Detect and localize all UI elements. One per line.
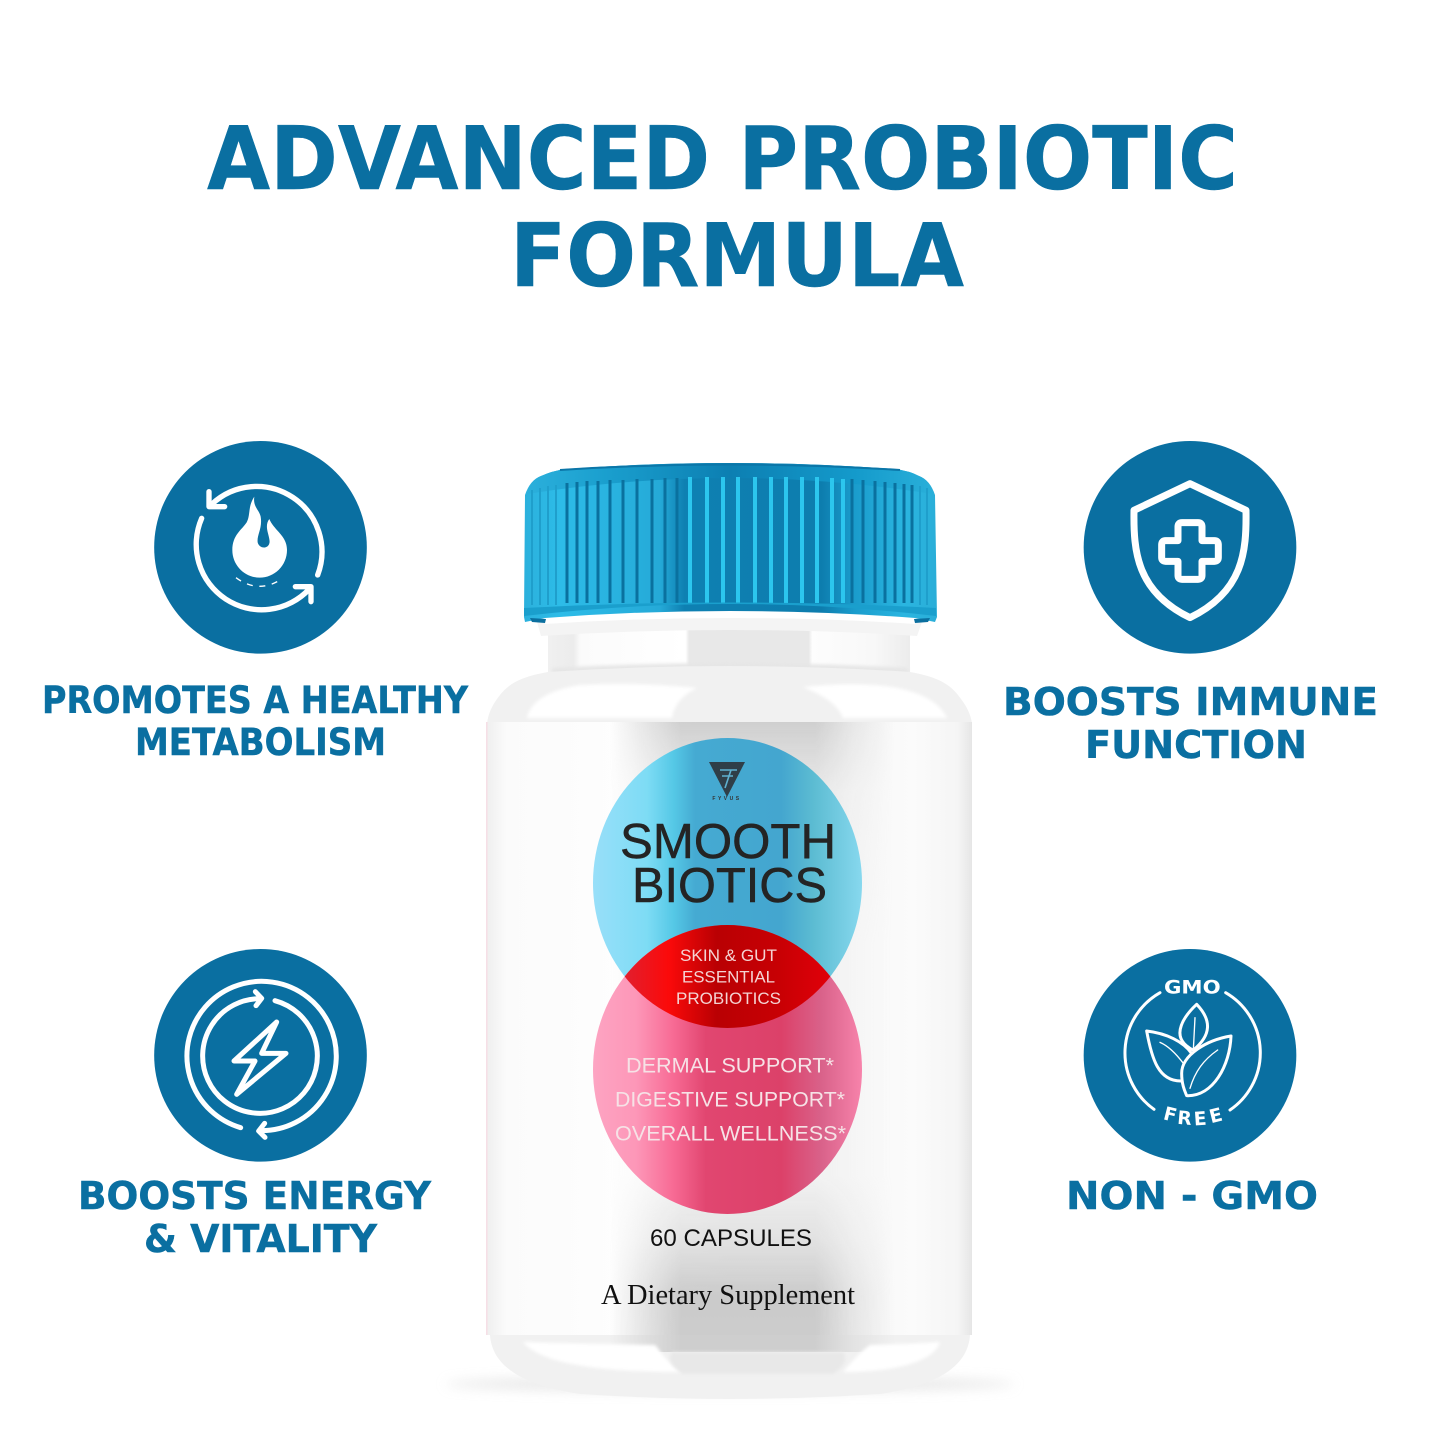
icon: energy bolt bbox=[154, 949, 367, 1162]
icon: GMO free badge: E bbox=[1207, 1105, 1225, 1128]
label: boosts immune function: FUNCTION bbox=[1085, 723, 1307, 767]
bottle ground shadow bbox=[445, 1377, 1015, 1391]
label: boosts energy and vitality: & VITALITY bbox=[144, 1217, 377, 1261]
label: red overlap bbox=[624, 925, 830, 1028]
title: ADVANCED PROBIOTIC bbox=[207, 108, 1238, 210]
bottle body bbox=[487, 722, 972, 1335]
product name bbox=[620, 815, 836, 913]
icon: GMO free badge: R bbox=[1176, 1108, 1193, 1130]
label: boosts immune function: BOOSTS IMMUNE bbox=[1003, 680, 1378, 724]
bottle neck bbox=[537, 612, 922, 680]
label: non GMO: NON - GMO bbox=[1066, 1174, 1318, 1218]
title bbox=[207, 108, 1238, 307]
overlap text: ESSENTIAL bbox=[682, 968, 775, 986]
overlap text: SKIN & GUT bbox=[680, 947, 777, 965]
icon: GMO free badge: GMO bbox=[1164, 978, 1221, 999]
label: pink circle bbox=[593, 925, 862, 1214]
capsule count: 60 CAPSULES bbox=[650, 1225, 812, 1252]
label: boosts immune function bbox=[1003, 680, 1378, 767]
label: promotes a healthy metabolism: METABOLISM bbox=[135, 721, 386, 764]
label: promotes a healthy metabolism bbox=[42, 679, 469, 764]
bottle bbox=[445, 463, 1015, 1399]
bottle base bbox=[490, 1335, 970, 1399]
product name: SMOOTH bbox=[620, 815, 836, 869]
title: FORMULA bbox=[510, 205, 964, 307]
overlap text bbox=[676, 947, 781, 1008]
label: boosts energy and vitality bbox=[78, 1174, 431, 1261]
benefits text: DIGESTIVE SUPPORT* bbox=[615, 1088, 845, 1112]
label: promotes a healthy metabolism: PROMOTES A HEALTHY bbox=[42, 679, 469, 722]
icon: GMO free badge: F bbox=[1161, 1104, 1179, 1127]
product name: BIOTICS bbox=[632, 859, 827, 913]
label: boosts energy and vitality: BOOSTS ENERGY bbox=[78, 1174, 431, 1218]
overlap text: PROBIOTICS bbox=[676, 990, 781, 1008]
benefits text: DERMAL SUPPORT* bbox=[626, 1054, 834, 1078]
label: blue circle bbox=[593, 738, 862, 1028]
icon: metabolism flame bbox=[154, 441, 367, 654]
icon: GMO free badge bbox=[1084, 949, 1296, 1162]
benefits text: OVERALL WELLNESS* bbox=[615, 1122, 846, 1146]
icon: immune shield bbox=[1084, 441, 1296, 654]
supplement line: A Dietary Supplement bbox=[601, 1279, 855, 1311]
icon: GMO free badge: E bbox=[1193, 1109, 1207, 1130]
brand logo bbox=[709, 762, 745, 802]
bottle cap bbox=[524, 463, 937, 623]
brand logo: FYVUS bbox=[712, 796, 742, 802]
benefits text bbox=[615, 1054, 846, 1146]
bottle shoulder bbox=[487, 666, 972, 724]
